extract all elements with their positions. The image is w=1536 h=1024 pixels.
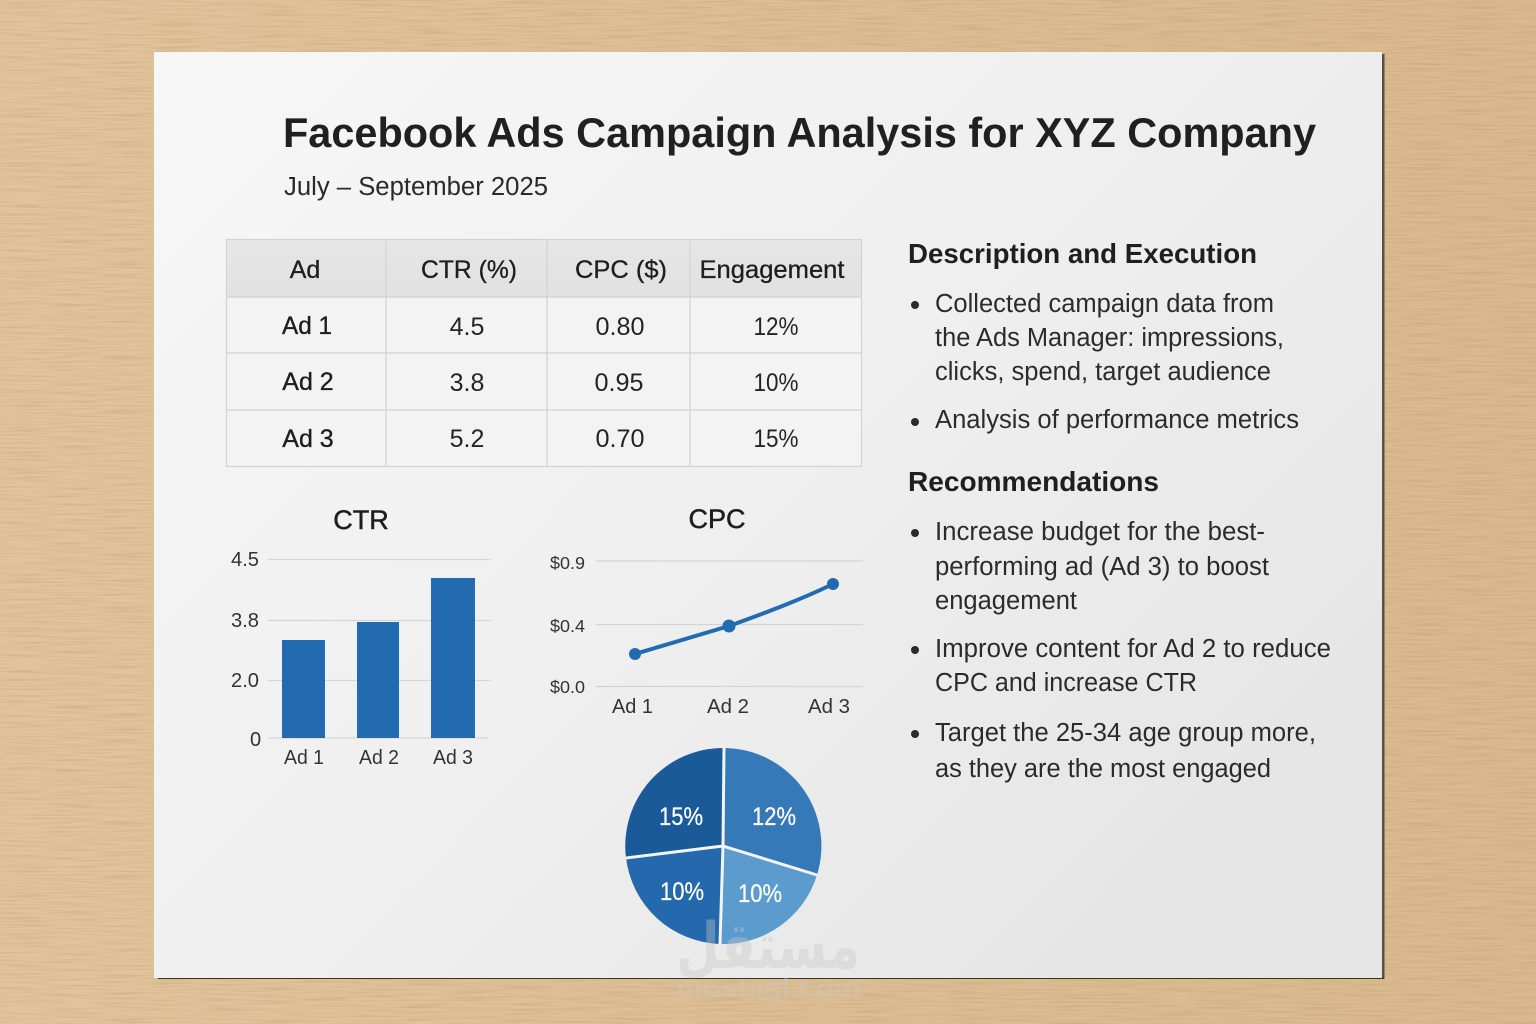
bullet list: recommendations: performing ad (Ad 3) to boost (935, 553, 1269, 581)
line chart: CPC (550, 504, 863, 718)
table row: Ad 2: Ad 2 (282, 368, 334, 396)
slice: Ad 1 12% (723, 748, 821, 875)
table row: Ad 1: 4.5 (450, 313, 484, 341)
CPC axis values (550, 553, 585, 697)
bullet list: description: clicks, spend, target audience (935, 358, 1271, 386)
paper sheet (154, 52, 1384, 979)
watermark: مستقل (676, 910, 860, 984)
CTR bars (282, 578, 475, 738)
CPC category labels: Ad 3 (808, 696, 850, 718)
CTR category labels: Ad 3 (433, 747, 473, 769)
table row: Ad 1: 12% (754, 313, 798, 341)
bullet list: recommendations: Improve content for Ad 2 to reduce (935, 635, 1331, 663)
CPC category labels: Ad 1 (612, 696, 653, 718)
CPC category labels (612, 696, 850, 718)
table: ad performance (226, 240, 862, 466)
CPC axis values: $0.9 (550, 553, 585, 573)
slice: 15% dark (625, 748, 724, 858)
watermark (676, 910, 860, 1003)
bar chart: CTR (231, 505, 491, 769)
CTR category labels (284, 747, 473, 769)
heading: recommendations: Recommendations (908, 466, 1159, 497)
table header row: CTR (%) (421, 256, 517, 284)
bullet list: recommendations: CPC and increase CTR (935, 669, 1197, 697)
slice: 10% light (720, 846, 817, 944)
CPC chart heading: CPC (688, 504, 746, 534)
watermark: mostaql.com (676, 973, 860, 1003)
table row: Ad 1: 0.80 (596, 313, 644, 341)
bullet list: recommendations: Target the 25-34 age group more, (935, 719, 1316, 747)
CTR chart heading: CTR (333, 505, 389, 535)
CTR axis values: 0 (250, 729, 261, 751)
bullet list: recommendations: as they are the most engaged (935, 755, 1271, 783)
bullet list: description (911, 290, 1299, 434)
pie labels (659, 803, 796, 908)
table row: Ad 2: 3.8 (450, 369, 484, 397)
heading: description and execution: Description and Execution (908, 238, 1257, 269)
CTR axis values: 2.0 (231, 670, 259, 692)
bullet list: description: the Ads Manager: impressions, (935, 324, 1284, 352)
table row: Ad 2: 0.95 (594, 369, 644, 397)
table header row: CPC ($) (575, 256, 667, 284)
slice: 10% mid (626, 846, 723, 944)
CTR axis values: 4.5 (231, 549, 259, 571)
CPC category labels: Ad 2 (707, 696, 749, 718)
CPC axis values: $0.0 (550, 677, 585, 697)
table header row (290, 256, 845, 284)
table row: Ad 3: Ad 3 (282, 425, 334, 453)
pie labels: 12% (752, 803, 796, 831)
table row: Ad 1: Ad 1 (282, 312, 332, 340)
pie labels: 10% (660, 878, 704, 906)
bullet list: recommendations (911, 518, 1331, 783)
table header row: Ad (290, 256, 320, 284)
table row: Ad 3: 5.2 (450, 425, 484, 453)
CPC line and markers (629, 578, 839, 660)
bullet list: recommendations: Increase budget for the best- (935, 518, 1265, 546)
pie labels: 10% (738, 880, 782, 908)
title: Facebook Ads Campaign Analysis for XYZ Company (283, 109, 1317, 156)
CTR axis values (231, 549, 261, 751)
bullet list: description: Collected campaign data from (935, 290, 1274, 318)
table row: Ad 3 (282, 425, 798, 453)
CTR axis values: 3.8 (231, 610, 259, 632)
CTR category labels: Ad 1 (284, 747, 324, 769)
bullet list: recommendations: engagement (935, 587, 1077, 615)
table row: Ad 2: 10% (754, 369, 798, 397)
CTR category labels: Ad 2 (359, 747, 399, 769)
bullet list: description: Analysis of performance metrics (935, 406, 1299, 434)
subtitle: date range: July – September 2025 (284, 173, 548, 201)
table row: Ad 1 (282, 312, 798, 341)
pie labels: 15% (659, 803, 703, 831)
table header row: Engagement (700, 256, 845, 284)
pie chart: engagement (625, 748, 821, 944)
table row: Ad 3: 0.70 (596, 425, 644, 453)
table row: Ad 2 (282, 368, 798, 397)
CPC axis values: $0.4 (550, 616, 585, 636)
table row: Ad 3: 15% (754, 425, 798, 453)
